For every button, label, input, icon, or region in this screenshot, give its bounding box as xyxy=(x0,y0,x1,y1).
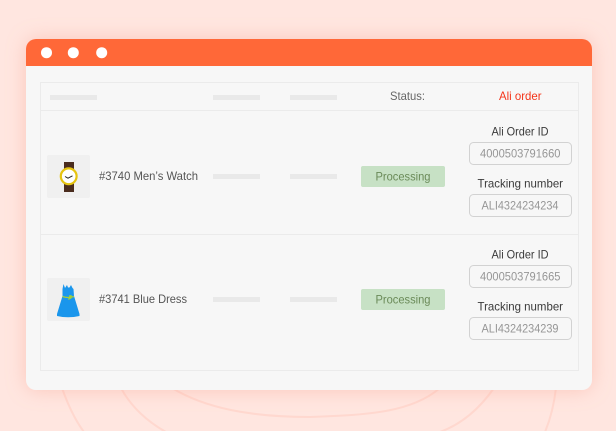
tracking number field: Tracking number xyxy=(478,176,563,190)
table header xyxy=(50,89,542,103)
tracking number field: ALI4324234234 xyxy=(482,198,559,212)
background curves xyxy=(62,388,556,431)
ali order id field: Ali Order ID xyxy=(492,124,549,138)
status heading: Status: xyxy=(390,89,425,103)
tracking number field xyxy=(470,176,572,216)
status badge: Processing xyxy=(376,170,430,184)
product name: #3740 Men’s Watch xyxy=(99,169,198,183)
ali order heading: Ali order xyxy=(499,89,542,103)
window title bar xyxy=(26,39,592,66)
placeholder bars xyxy=(213,297,337,302)
ali order id field: Ali Order ID xyxy=(492,248,549,262)
tracking number field: ALI4324234239 xyxy=(482,322,559,336)
product name: #3741 Blue Dress xyxy=(99,292,187,306)
thumbnail: watch xyxy=(47,155,90,198)
ali order id field: 4000503791660 xyxy=(480,146,561,160)
window dot 1 xyxy=(41,47,52,58)
window dot 3 xyxy=(96,47,107,58)
header placeholder bars xyxy=(50,95,337,100)
tracking number field: Tracking number xyxy=(478,300,563,314)
ali order id field xyxy=(470,248,572,288)
status badge: Processing xyxy=(376,292,430,306)
app window card xyxy=(26,39,592,390)
thumbnail: dress xyxy=(47,278,90,321)
order row 2 xyxy=(47,248,572,340)
ali order id field xyxy=(470,124,572,164)
status badge xyxy=(361,166,445,187)
placeholder bars xyxy=(213,174,337,179)
order row 1 xyxy=(47,124,572,216)
ali order id field: 4000503791665 xyxy=(480,270,561,284)
tracking number field xyxy=(470,300,572,340)
status badge xyxy=(361,289,445,310)
window dot 2 xyxy=(68,47,79,58)
orders table xyxy=(40,82,578,370)
